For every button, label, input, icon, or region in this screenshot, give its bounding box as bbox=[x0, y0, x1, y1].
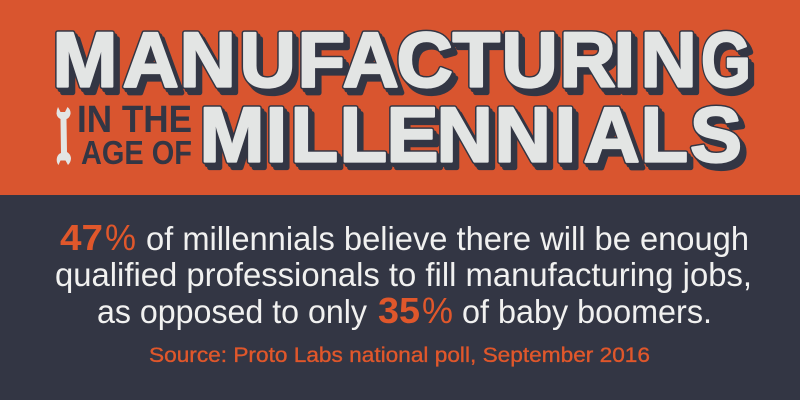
title: MILLENNIALS: MILLENNIALS bbox=[204, 96, 747, 184]
title: MANUFACTURING: MANUFACTURIN bbox=[58, 22, 702, 110]
title: MANUFACTURING: MANUFACTURIN bbox=[52, 16, 697, 104]
statistic text block: as opposed to only bbox=[97, 293, 367, 330]
panel: dark statistic band bbox=[0, 195, 800, 400]
statistic text block bbox=[55, 217, 752, 331]
subtitle: AGE OF: AGE OF bbox=[81, 135, 192, 172]
source line: Source: Proto Labs national poll, September 2016 bbox=[149, 344, 650, 367]
title: MANUFACTURING: G bbox=[701, 16, 751, 104]
title: MANUFACTURING: MANUFACTURIN bbox=[52, 16, 697, 104]
statistic text block: 35 bbox=[378, 290, 420, 331]
title: MANUFACTURING: G bbox=[701, 16, 751, 104]
subtitle: IN THE: IN THE bbox=[77, 99, 192, 141]
title: MANUFACTURING: G bbox=[706, 22, 756, 110]
title: MILLENNIALS: MILLENNIALS bbox=[202, 94, 745, 182]
statistic text block: % bbox=[422, 290, 453, 331]
title: MANUFACTURING: G bbox=[704, 18, 754, 106]
statistic text block: % bbox=[105, 217, 136, 258]
title: MANUFACTURING: MANUFACTURIN bbox=[55, 18, 699, 106]
panel: orange title band bbox=[0, 0, 800, 195]
statistic text block: of baby boomers. bbox=[462, 293, 712, 330]
statistic text block: 47 bbox=[60, 217, 103, 258]
title: MILLENNIALS: MILLENNIALS bbox=[200, 90, 742, 178]
statistic text block: qualified professionals to fill manufacturing jobs, bbox=[55, 256, 752, 293]
statistic text block: of millennials believe there will be enough bbox=[146, 220, 749, 257]
title: MILLENNIALS: MILLENNIALS bbox=[200, 90, 742, 178]
icon: wrench bbox=[56, 107, 71, 165]
